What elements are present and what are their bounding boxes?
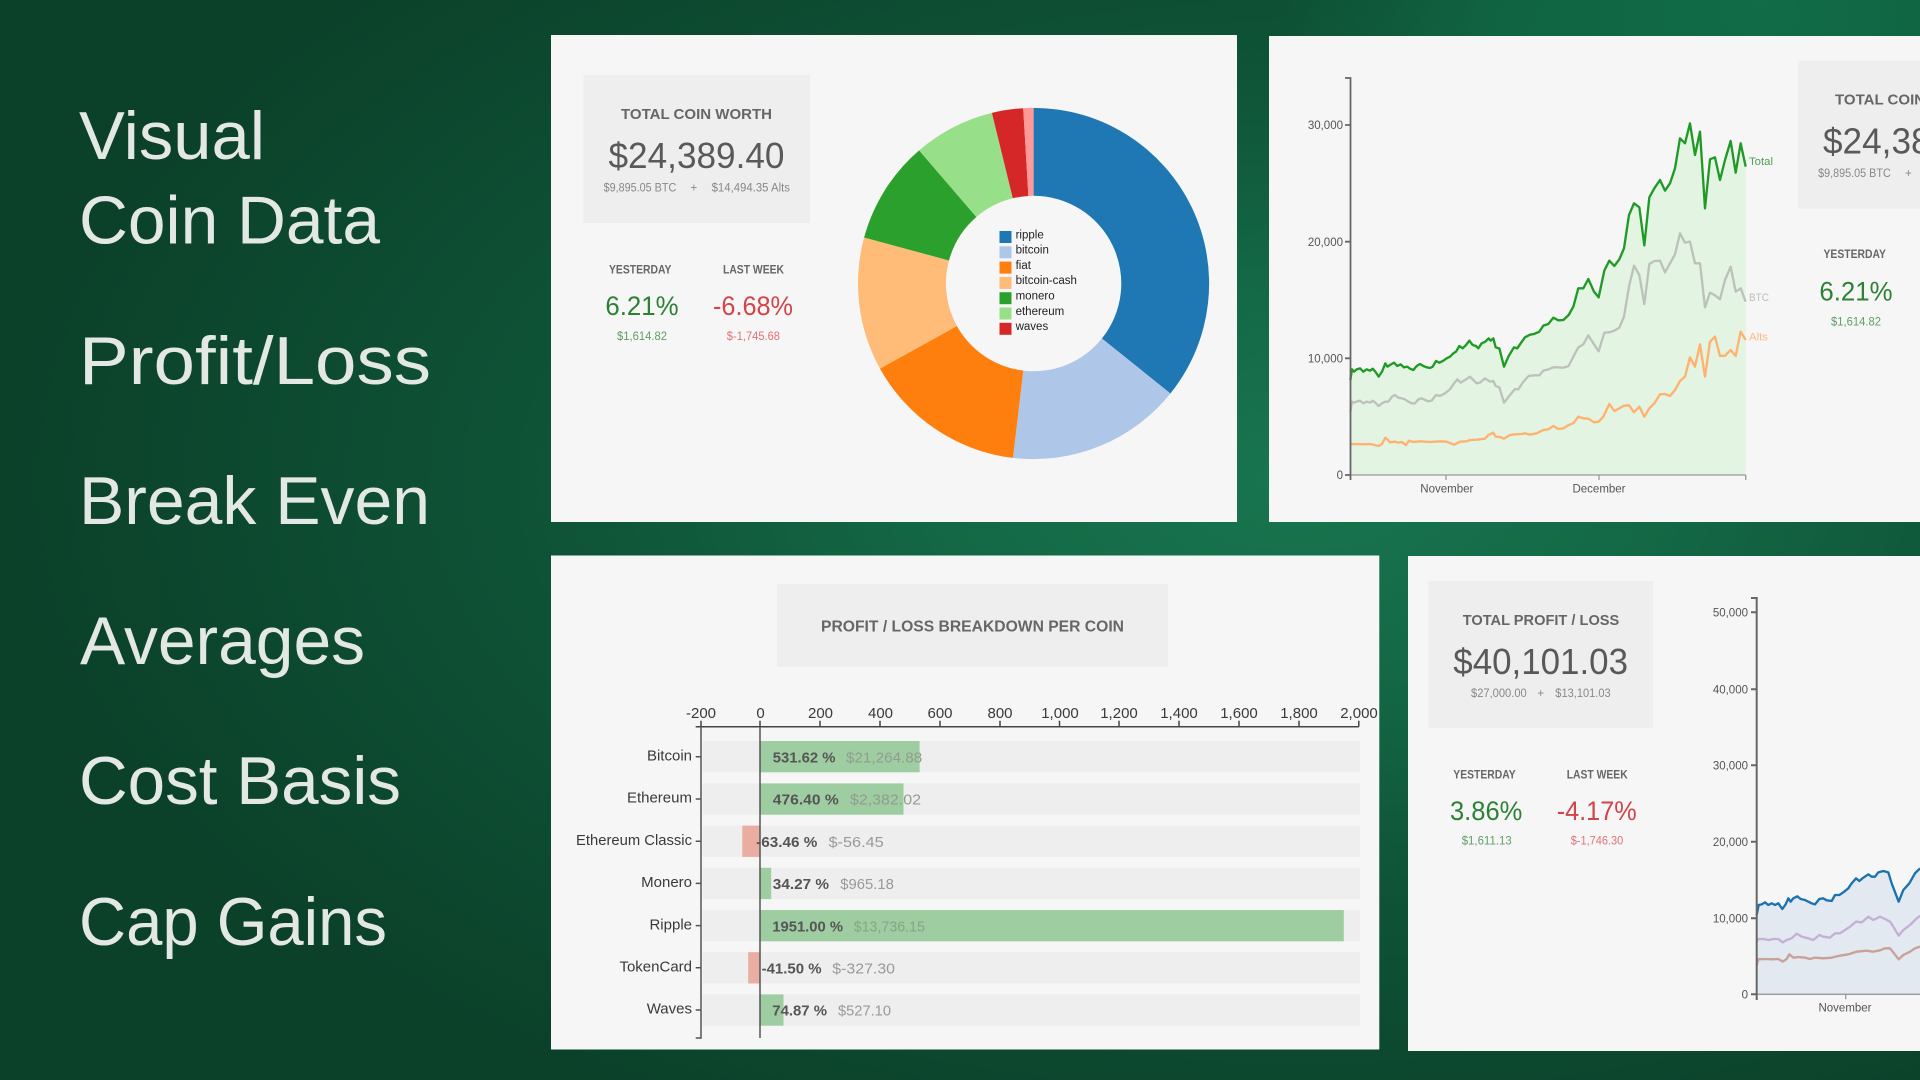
feature: Cost Basis: Cost Basis (79, 743, 401, 819)
row: TokenCard values (762, 962, 895, 978)
coin labels: Bitcoin (647, 748, 692, 764)
panel: total profit / loss with line chart (1408, 556, 1920, 1051)
donut chart (858, 108, 1209, 459)
axis labels: 0 (1337, 470, 1343, 482)
axes (696, 721, 1359, 727)
axis labels: November (1818, 1003, 1872, 1015)
row: Monero values: $965.18 (840, 877, 894, 893)
stat: last week: LAST WEEK (1567, 769, 1628, 781)
axis labels: 20,000 (1713, 837, 1748, 849)
axis labels: 600 (927, 705, 953, 722)
legend: ripple (1016, 230, 1044, 242)
row: Ethereum Classic values: -63.46 % (756, 835, 817, 851)
axis labels: November (1420, 484, 1473, 496)
stat box: total coin worth (cropped): + (1905, 168, 1912, 180)
axis labels: 1,800 (1280, 705, 1318, 722)
axis labels: 30,000 (1308, 120, 1343, 132)
row: Waves values (772, 1004, 891, 1020)
coin labels: Ethereum (627, 790, 692, 806)
axis labels: 1,600 (1220, 705, 1258, 722)
axis labels: 1,000 (1041, 705, 1079, 722)
row backgrounds (703, 741, 1360, 1026)
stat box: total profit / loss: TOTAL PROFIT / LOSS (1463, 612, 1619, 629)
axis labels: 400 (868, 705, 893, 722)
heading: Visual Coin Data: Coin Data (79, 182, 380, 258)
stat box: total profit / loss (1454, 614, 1626, 698)
legend (1000, 230, 1077, 335)
row: Ethereum values: 476.40 % (773, 793, 839, 809)
stat box: total coin worth (cropped) (1818, 94, 1920, 178)
axis labels: 0 (1742, 990, 1748, 1002)
bars (742, 741, 1344, 1026)
axis labels: 1,200 (1100, 705, 1138, 722)
row: Ripple values: $13,736.15 (854, 919, 925, 935)
feature: Cap Gains: Cap Gains (79, 884, 387, 960)
legend: fiat (1016, 260, 1032, 272)
stat box: total coin worth: $14,494.35 Alts (712, 182, 790, 194)
stat: last week (713, 264, 793, 343)
panel: total coin worth with donut chart (551, 35, 1237, 522)
legend: waves (1015, 321, 1048, 333)
line chart: profit breakdown (1713, 598, 1920, 1015)
series labels: BTC (1749, 292, 1769, 304)
stat: yesterday: 6.21% (605, 291, 679, 321)
coin labels: Ripple (649, 916, 692, 934)
row: Ethereum values: $2,382.02 (850, 793, 921, 809)
heading: Visual Coin Data (79, 98, 380, 258)
row: Bitcoin values: 531.62 % (773, 750, 836, 766)
row: TokenCard values: -41.50 % (762, 962, 822, 978)
stat: yesterday: YESTERDAY (609, 264, 672, 276)
row: Waves values: 74.87 % (772, 1004, 827, 1020)
axis labels: 40,000 (1713, 684, 1748, 696)
stat box: total coin worth: + (690, 182, 697, 194)
coin labels: TokenCard (619, 958, 692, 976)
axis labels (686, 705, 1378, 722)
axis labels: 1,400 (1160, 705, 1198, 722)
row: Bitcoin values: $21,264.88 (846, 750, 922, 766)
stat: yesterday (605, 264, 679, 343)
stat: yesterday: $1,611.13 (1462, 835, 1512, 847)
row: TokenCard values: $-327.30 (832, 962, 895, 978)
axes (1350, 475, 1746, 480)
stat: yesterday (cropped panel): YESTERDAY (1824, 249, 1886, 261)
stat: last week (1557, 769, 1637, 847)
stat box: total coin worth (584, 75, 810, 223)
stat box: total profit / loss: $40,101.03 (1453, 641, 1628, 682)
coin labels: Waves (647, 1000, 692, 1018)
stat: yesterday (cropped panel): $1,614.82 (1831, 316, 1881, 328)
stat box: total coin worth (cropped): $9,895.05 BTC (1818, 168, 1891, 180)
legend: bitcoin (1016, 244, 1049, 256)
series labels: Total (1749, 156, 1773, 168)
stat: last week: LAST WEEK (723, 264, 785, 276)
stat: yesterday: YESTERDAY (1453, 769, 1516, 781)
stat: yesterday: 3.86% (1450, 796, 1522, 826)
feature: Averages: Averages (80, 603, 365, 679)
line chart: total, BTC and alts (1308, 78, 1773, 496)
axis labels: 2,000 (1340, 705, 1378, 722)
axis labels: 0 (756, 705, 765, 722)
coin labels: Monero (641, 874, 692, 891)
stat: yesterday (cropped panel) (1819, 249, 1893, 328)
axis labels: 10,000 (1713, 914, 1748, 926)
row: Ripple values: 1951.00 % (772, 919, 843, 935)
stat: last week: $-1,746.30 (1571, 835, 1623, 847)
stat: last week: $-1,745.68 (727, 331, 780, 343)
panel: profit / loss breakdown per coin (551, 556, 1379, 1050)
axis labels: 200 (808, 705, 833, 722)
stat box: total coin worth: $24,389.40 (608, 135, 784, 176)
stat: last week: -4.17% (1557, 796, 1637, 826)
row: Monero values (773, 877, 894, 893)
feature: Break Even: Break Even (79, 463, 430, 539)
stat: last week: -6.68% (713, 291, 793, 321)
stat box: total coin worth: TOTAL COIN WORTH (621, 106, 772, 123)
axis labels: 800 (987, 705, 1013, 722)
row: Ethereum values (773, 793, 921, 809)
legend: bitcoin-cash (1016, 275, 1077, 287)
stat box: total coin worth: $9,895.05 BTC (604, 182, 676, 194)
stat box: total profit / loss: $13,101.03 (1555, 688, 1611, 700)
panel: coin worth line chart (1269, 36, 1920, 522)
row: Monero values: 34.27 % (773, 877, 829, 893)
stat box: total profit / loss: $27,000.00 (1471, 688, 1527, 700)
axis labels: 10,000 (1308, 353, 1343, 365)
axis labels: -200 (686, 705, 716, 722)
feature list (79, 98, 431, 960)
series labels (1749, 156, 1773, 344)
axis labels (1713, 608, 1872, 1015)
stat: yesterday: $1,614.82 (617, 331, 667, 343)
heading: Visual Coin Data: Visual (79, 98, 265, 174)
axes (1757, 994, 1920, 999)
row: Bitcoin values (773, 750, 922, 766)
coin labels (576, 748, 692, 1018)
legend: ethereum (1016, 306, 1064, 318)
chart title: PROFIT / LOSS BREAKDOWN PER COIN (821, 618, 1124, 635)
axis labels (1308, 120, 1626, 496)
axis labels: 20,000 (1308, 237, 1343, 249)
legend: monero (1016, 290, 1055, 302)
row: Ethereum Classic values (756, 835, 884, 851)
coin labels: Ethereum Classic (576, 832, 692, 849)
feature: Profit/Loss: Profit/Loss (79, 323, 431, 399)
axis labels: 50,000 (1713, 608, 1748, 620)
row: Ethereum Classic values: $-56.45 (828, 835, 884, 851)
row: Ripple values (772, 919, 925, 935)
row: Waves values: $527.10 (838, 1004, 891, 1020)
stat: yesterday (cropped panel): 6.21% (1819, 276, 1893, 306)
axis labels: 30,000 (1713, 760, 1748, 772)
stat box: total profit / loss: + (1537, 688, 1544, 700)
bar chart (576, 705, 1378, 1038)
series labels: Alts (1749, 332, 1769, 344)
stat: yesterday (1450, 769, 1522, 847)
chart title (777, 584, 1168, 667)
axis labels: December (1572, 484, 1626, 496)
